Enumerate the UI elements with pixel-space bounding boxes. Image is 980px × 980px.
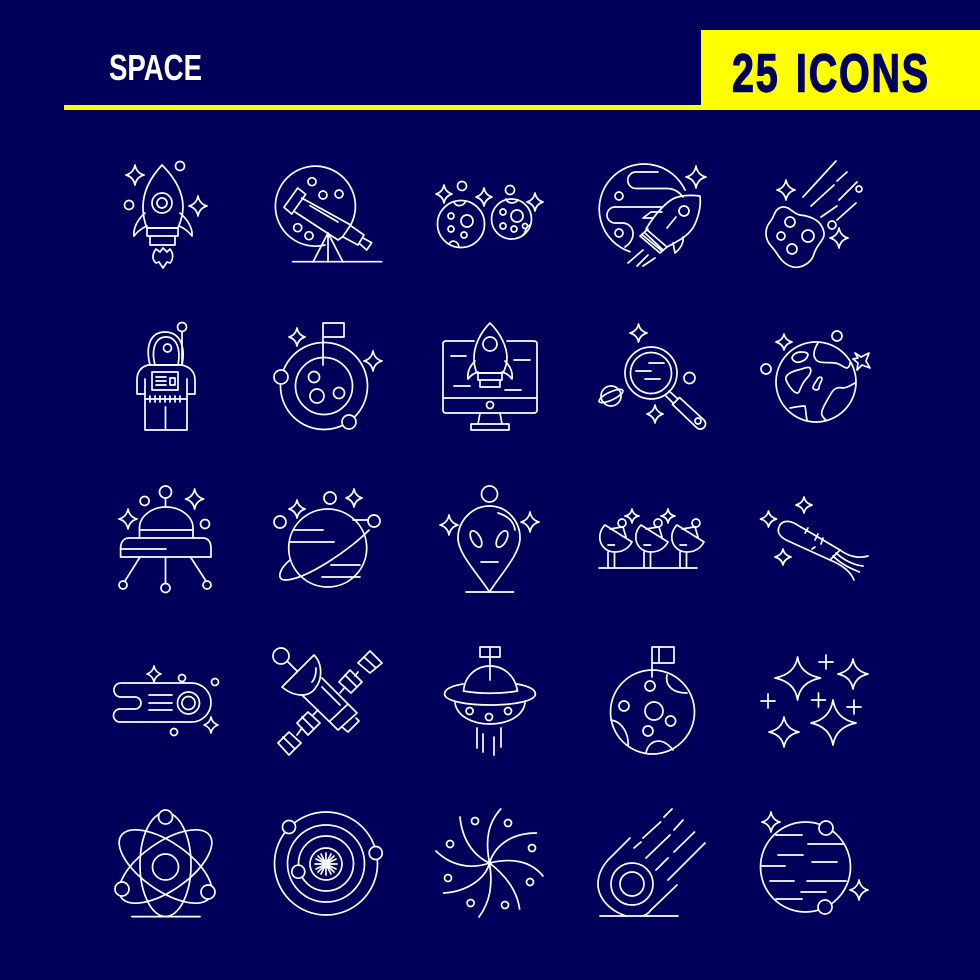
icon: atom bbox=[107, 810, 224, 917]
icon: galaxy spiral bbox=[436, 809, 543, 917]
icon: ringed planet bbox=[274, 489, 380, 587]
icon: stars bbox=[761, 655, 868, 747]
icon: astronaut bbox=[137, 322, 195, 430]
icon: comet bbox=[114, 666, 218, 736]
icon: flagged planet with orbit bbox=[274, 323, 382, 430]
icon: solar system bbox=[274, 812, 382, 915]
icon: moon with flag bbox=[610, 647, 694, 754]
icon: striped planet bbox=[760, 812, 868, 914]
icon: meteor bbox=[598, 809, 705, 916]
icon: comet tail bbox=[760, 497, 868, 580]
title: SPACE: SPACE bbox=[109, 47, 202, 88]
icon: rocket bbox=[124, 162, 207, 268]
icon: two moons bbox=[436, 182, 543, 248]
icon: alien pin bbox=[440, 486, 539, 592]
icon: flying saucer bbox=[445, 647, 535, 755]
icon: ufo with legs bbox=[119, 486, 211, 592]
icon: radio dishes bbox=[599, 509, 704, 568]
icon: telescope and moon bbox=[275, 166, 382, 262]
icon: earth bbox=[761, 331, 870, 422]
icon: asteroid bbox=[766, 161, 862, 267]
icon: magnifier with planet bbox=[598, 324, 706, 429]
header rule bbox=[64, 105, 704, 110]
header badge: 25 icons bbox=[701, 30, 980, 110]
icon: planet with rocket bbox=[599, 164, 706, 266]
header badge: 25 icons: 25 ICONS bbox=[732, 44, 930, 104]
icon: satellite bbox=[273, 648, 382, 755]
icon: monitor with rocket bbox=[443, 323, 537, 430]
